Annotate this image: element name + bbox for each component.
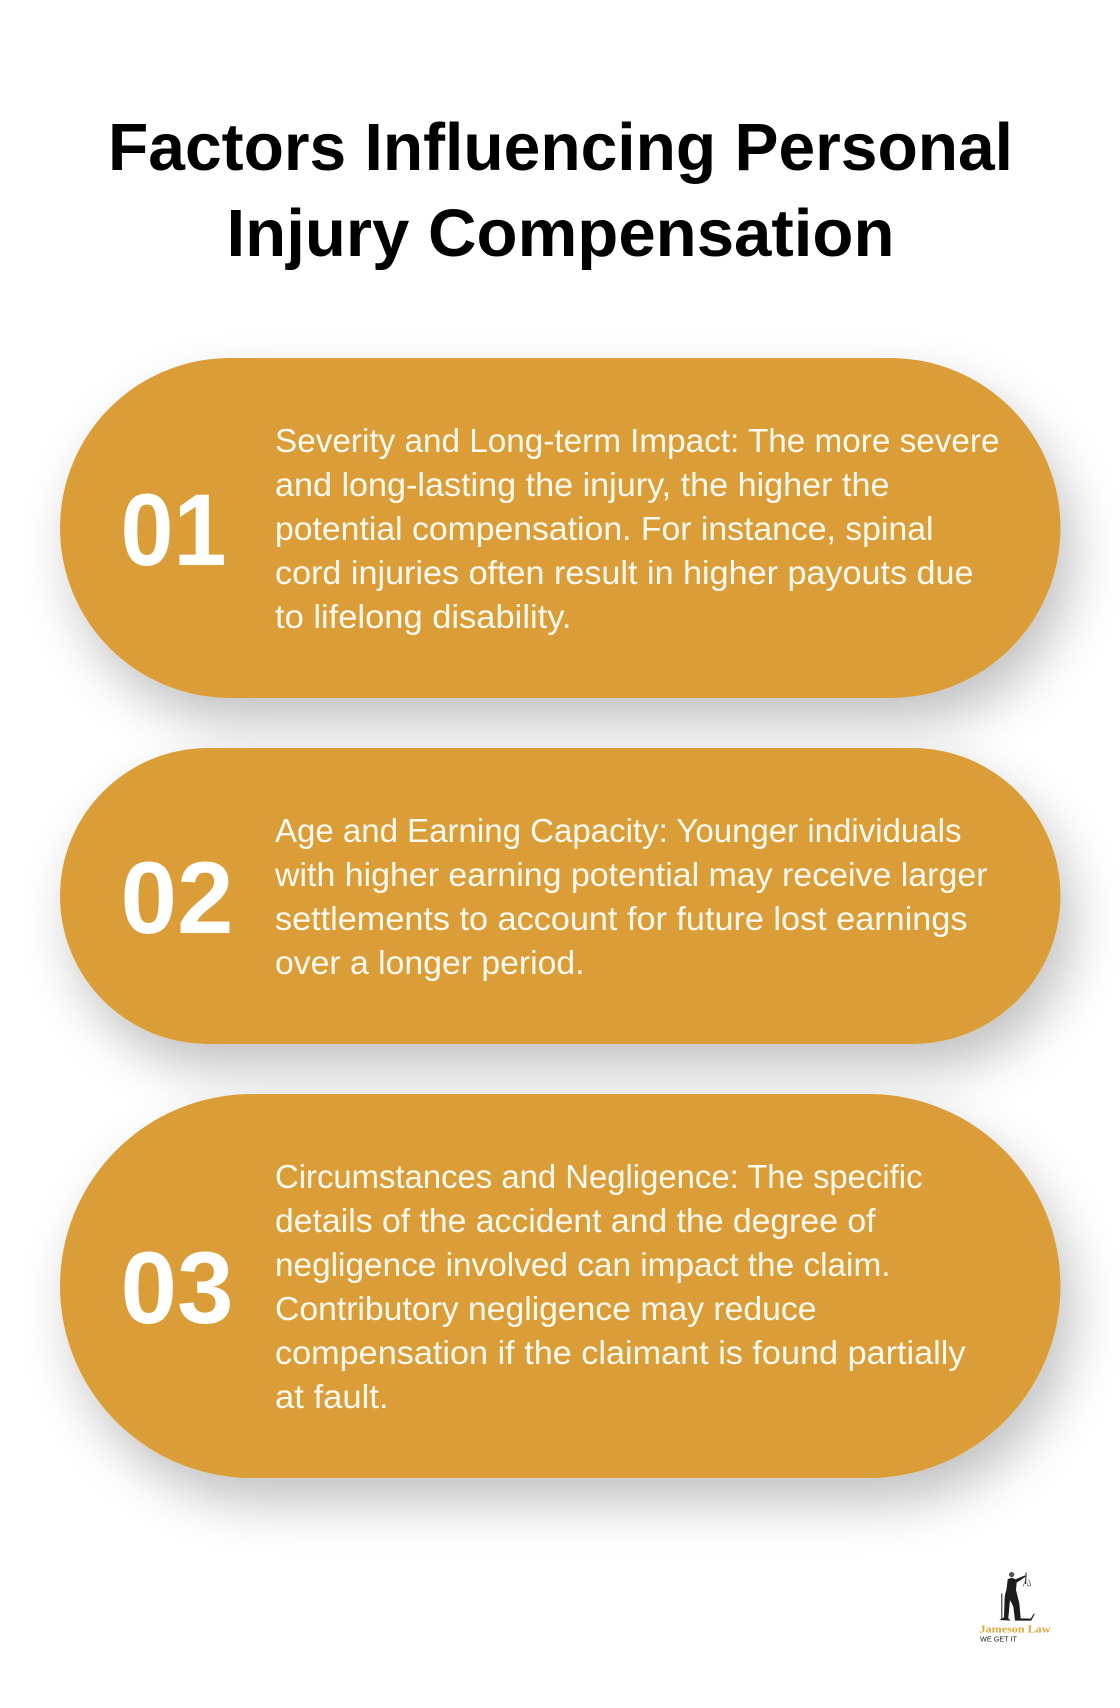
title: Factors Influencing Personal bbox=[108, 110, 1013, 185]
number 01: 01 bbox=[120, 473, 226, 587]
text: severity and long-term impact bbox=[275, 423, 1000, 636]
text: age and earning capacity bbox=[274, 813, 987, 982]
number 03: 03 bbox=[120, 1231, 234, 1345]
text: severity and long-term impact: potential compensation. For instance, spinal bbox=[275, 511, 934, 548]
text: age and earning capacity: with higher earning potential may receive larger bbox=[274, 857, 987, 894]
panel: factor 03 bbox=[60, 1094, 1060, 1478]
text: circumstances and negligence: Circumstances and Negligence: The specific bbox=[275, 1159, 922, 1196]
text: age and earning capacity: Age and Earning Capacity: Younger individuals bbox=[275, 813, 962, 850]
text: circumstances and negligence bbox=[275, 1159, 966, 1416]
panel: factor 02 bbox=[60, 748, 1060, 1044]
text: severity and long-term impact: and long-lasting the injury, the higher the bbox=[275, 467, 890, 504]
number 02: 02 bbox=[120, 841, 234, 955]
text: circumstances and negligence: at fault. bbox=[275, 1379, 388, 1416]
text: age and earning capacity: over a longer period. bbox=[275, 945, 584, 982]
text: age and earning capacity: settlements to account for future lost earnings bbox=[275, 901, 968, 938]
text: circumstances and negligence: negligence involved can impact the claim. bbox=[275, 1247, 890, 1284]
text: severity and long-term impact: cord injuries often result in higher payouts due bbox=[275, 555, 974, 592]
text: circumstances and negligence: details of the accident and the degree of bbox=[275, 1203, 876, 1240]
text: circumstances and negligence: compensation if the claimant is found partially bbox=[275, 1335, 966, 1372]
title bbox=[108, 110, 1013, 271]
text: severity and long-term impact: Severity and Long-term Impact: The more severe bbox=[275, 423, 1000, 460]
brand name: Jameson Law bbox=[980, 1624, 1051, 1636]
logo: Jameson Law bbox=[980, 1572, 1051, 1644]
tagline: WE GET IT bbox=[980, 1636, 1018, 1644]
title: Injury Compensation bbox=[226, 196, 895, 271]
text: circumstances and negligence: Contributory negligence may reduce bbox=[275, 1291, 816, 1328]
text: severity and long-term impact: to lifelong disability. bbox=[275, 599, 572, 636]
panel: factor 01 bbox=[60, 358, 1060, 698]
icon: lady justice bbox=[999, 1572, 1035, 1621]
